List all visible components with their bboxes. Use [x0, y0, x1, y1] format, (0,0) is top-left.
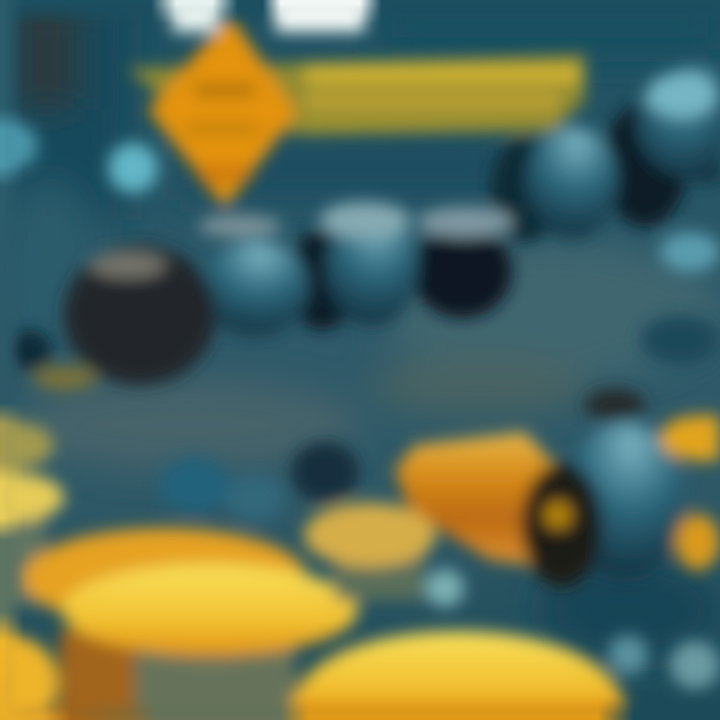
- drum body, centre: [130, 630, 295, 720]
- small teal orbs, left side: [0, 121, 158, 193]
- cylinder hub: [544, 501, 572, 529]
- sphere centre: [326, 210, 418, 326]
- pale cap, left: [198, 215, 282, 237]
- teal orb beside small drum: [426, 569, 464, 607]
- pale highlight top right: [646, 73, 718, 117]
- drum, bottom centre: [290, 631, 626, 720]
- pale orbs, lower right: [608, 635, 648, 675]
- dark shadow, central right: [412, 226, 512, 318]
- sphere left of centre: [201, 240, 309, 336]
- pale cap, centre right: [417, 207, 513, 237]
- dark sphere left: [8, 245, 216, 390]
- small drum, centre: [304, 503, 436, 567]
- yellow banner heading: [128, 55, 585, 135]
- small drum body: [335, 545, 425, 600]
- gold cap, right: [660, 415, 720, 461]
- top white lights: [172, 0, 365, 32]
- sphere middle right: [526, 126, 618, 238]
- sphere right edge: [640, 315, 720, 365]
- cylinder body: [395, 432, 560, 565]
- large gold drums: [0, 503, 720, 720]
- dark cylinder end: [522, 463, 602, 587]
- dark crescent, middle right: [491, 138, 559, 242]
- orange diamond sign: [148, 15, 298, 208]
- teal sphere behind cylinder end: [565, 422, 685, 578]
- drum, back layer: [23, 528, 307, 628]
- sphere top right: [637, 67, 720, 182]
- dark crescent, right: [603, 103, 687, 227]
- dark shadow, central left: [288, 230, 356, 330]
- drum, bottom left: [0, 636, 58, 720]
- small spheres, lower middle: [159, 389, 645, 522]
- gold piece, lower right: [676, 514, 720, 570]
- gold cylinder: [395, 415, 720, 587]
- sphere far right: [660, 232, 720, 272]
- gold stack, left edge: [0, 421, 64, 605]
- teal spheres with dark shadows: [198, 67, 720, 365]
- pale cap, centre: [320, 202, 410, 238]
- drum, top layer: [62, 564, 358, 656]
